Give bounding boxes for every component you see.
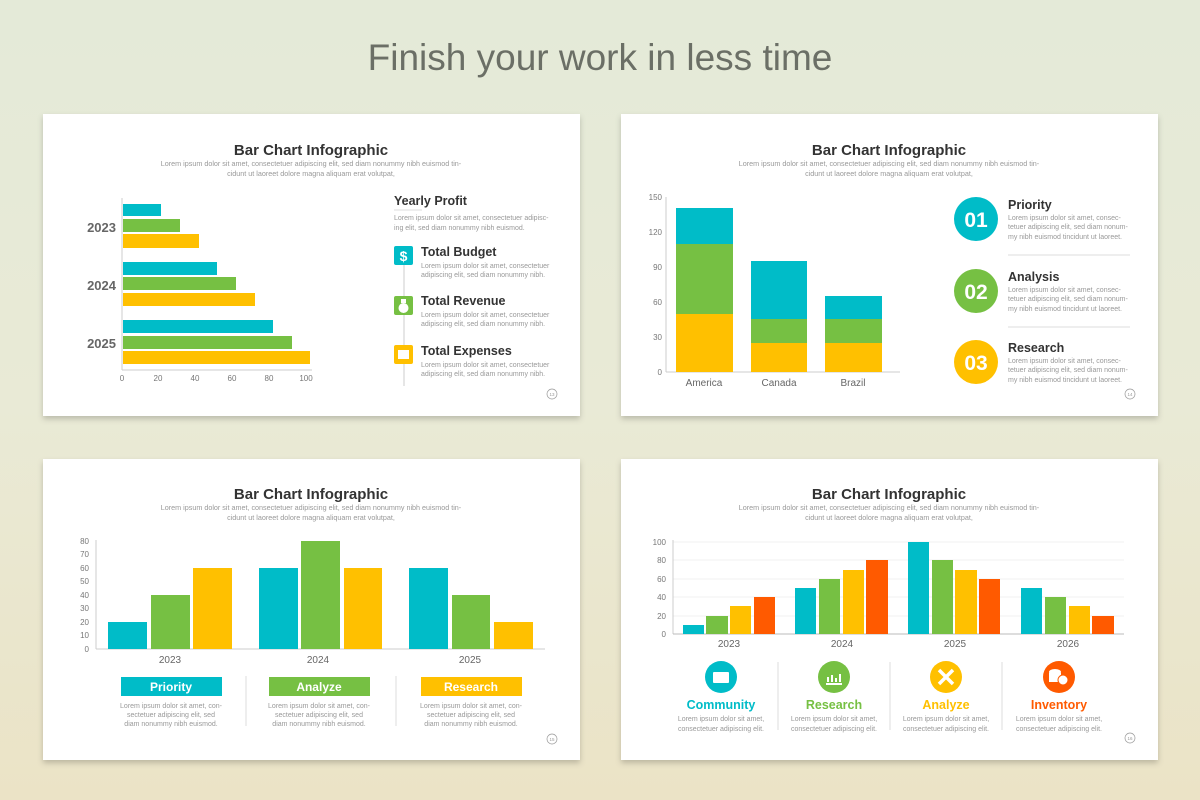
item: community: Lorem ipsum dolor sit amet, <box>678 716 764 723</box>
stacked bar chart: 150 <box>649 193 663 202</box>
item 01 priority <box>954 197 1129 241</box>
item 03 research: my nibh euismod tincidunt ut laoreet. <box>1008 377 1122 384</box>
item 02 analysis <box>954 269 1129 313</box>
grouped bar chart: 20 <box>657 612 667 621</box>
grouped bar chart: 2025 <box>459 655 482 666</box>
grouped bar chart: 80 <box>657 556 667 565</box>
stacked bar chart <box>649 193 900 389</box>
item 03 research: 03 <box>964 352 988 375</box>
item: analyze <box>903 661 989 733</box>
label: analyze: Analyze <box>296 680 342 694</box>
label: research <box>420 677 523 728</box>
panel: grouped bar chart 4 series <box>621 459 1158 760</box>
item 03 research: tetuer adipiscing elit, sed diam nonum- <box>1008 367 1129 374</box>
grouped bar chart: 80 <box>80 537 90 546</box>
main title: Finish your work in less time <box>368 37 832 78</box>
horizontal bar chart: 40 <box>191 374 200 383</box>
icon: coins <box>394 345 413 364</box>
heading: Lorem ipsum dolor sit amet, consectetuer adipiscing elit, sed diam nonummy nibh euismod tin- <box>739 159 1040 168</box>
item: analyze: consectetuer adipiscing elit. <box>903 726 989 733</box>
item: inventory: Lorem ipsum dolor sit amet, <box>1016 716 1102 723</box>
heading: Lorem ipsum dolor sit amet, consectetuer adipiscing elit, sed diam nonummy nibh euismod tin- <box>161 503 462 512</box>
label: priority: Lorem ipsum dolor sit amet, con- <box>120 703 223 710</box>
grouped bar chart: 100 <box>653 538 667 547</box>
grouped bar chart: 10 <box>80 631 90 640</box>
item: total expenses <box>421 344 550 378</box>
item 01 priority: Lorem ipsum dolor sit amet, consec- <box>1008 215 1121 222</box>
page number: 14 <box>1127 392 1133 397</box>
item: total budget: adipiscing elit, sed diam nonummy nibh. <box>421 272 545 279</box>
heading: Bar Chart Infographic <box>234 486 388 503</box>
grouped bar chart: 2024 <box>831 639 854 650</box>
heading: cidunt ut laoreet dolore magna aliquam erat volutpat, <box>227 513 395 522</box>
item: total revenue: adipiscing elit, sed diam nonummy nibh. <box>421 321 545 328</box>
item: inventory: Inventory <box>1031 698 1087 712</box>
page number: 15 <box>549 737 555 742</box>
item: analyze: Lorem ipsum dolor sit amet, <box>903 716 989 723</box>
heading: cidunt ut laoreet dolore magna aliquam erat volutpat, <box>805 513 973 522</box>
heading <box>161 142 462 178</box>
grouped bar chart: 60 <box>80 564 90 573</box>
grouped bar chart: 20 <box>80 618 90 627</box>
label: research: Lorem ipsum dolor sit amet, con- <box>420 703 523 710</box>
page number: 16 <box>1127 736 1133 741</box>
grouped bar chart: 2024 <box>307 655 330 666</box>
horizontal bar chart: 0 <box>120 374 125 383</box>
page number <box>1125 389 1135 399</box>
item: total budget: Total Budget <box>421 245 497 259</box>
item 01 priority: Priority <box>1008 198 1052 212</box>
grouped bar chart: 2023 <box>718 639 741 650</box>
item 03 research: Lorem ipsum dolor sit amet, consec- <box>1008 358 1121 365</box>
horizontal bar chart: 100 <box>299 374 313 383</box>
item: total revenue: Lorem ipsum dolor sit amet, consectetuer <box>421 312 550 319</box>
grouped bar chart: 2025 <box>944 639 967 650</box>
item 03 research: Research <box>1008 341 1064 355</box>
stacked bar chart: 60 <box>653 298 663 307</box>
item: total expenses: Lorem ipsum dolor sit amet, consectetuer <box>421 362 550 369</box>
text: yearly profit: Lorem ipsum dolor sit amet, consectetuer adipisc- <box>394 215 549 222</box>
stacked bar chart: 90 <box>653 263 663 272</box>
heading: Lorem ipsum dolor sit amet, consectetuer adipiscing elit, sed diam nonummy nibh euismod tin- <box>739 503 1040 512</box>
item 01 priority: 01 <box>964 209 988 232</box>
item: research: consectetuer adipiscing elit. <box>791 726 877 733</box>
horizontal bar chart: 2025 <box>87 336 116 351</box>
grouped bar chart: 50 <box>80 577 90 586</box>
item: total expenses: Total Expenses <box>421 344 512 358</box>
grouped bar chart: 0 <box>662 630 667 639</box>
grouped bar chart: 70 <box>80 550 90 559</box>
item 02 analysis: my nibh euismod tincidunt ut laoreet. <box>1008 306 1122 313</box>
heading: cidunt ut laoreet dolore magna aliquam erat volutpat, <box>227 169 395 178</box>
page number <box>547 389 557 399</box>
horizontal bar chart <box>87 198 313 383</box>
text: yearly profit <box>394 194 549 232</box>
grouped bar chart <box>653 538 1124 650</box>
panel: stacked bar chart <box>621 114 1158 416</box>
item: total budget <box>421 245 550 279</box>
text: yearly profit: Yearly Profit <box>394 194 468 208</box>
grouped bar chart: 2026 <box>1057 639 1080 650</box>
grouped bar chart: 60 <box>657 575 667 584</box>
stacked bar chart: 30 <box>653 333 663 342</box>
item 03 research <box>954 340 1129 384</box>
page number <box>547 734 557 744</box>
stacked bar chart: Canada <box>761 378 797 389</box>
item: inventory <box>1016 661 1102 733</box>
item 02 analysis: 02 <box>964 281 988 304</box>
item: community <box>678 661 764 733</box>
item: research: Research <box>806 698 862 712</box>
grouped bar chart: 2023 <box>159 655 182 666</box>
horizontal bar chart: 60 <box>228 374 237 383</box>
item 01 priority: my nibh euismod tincidunt ut laoreet. <box>1008 234 1122 241</box>
item 01 priority: tetuer adipiscing elit, sed diam nonum- <box>1008 224 1129 231</box>
stacked bar chart: Brazil <box>840 378 866 389</box>
horizontal bar chart: 2023 <box>87 220 116 235</box>
heading: Bar Chart Infographic <box>812 142 966 159</box>
panel: horizontal bar chart <box>43 114 580 416</box>
label: analyze: sectetuer adipiscing elit, sed <box>275 712 363 719</box>
horizontal bar chart: 80 <box>265 374 274 383</box>
item 02 analysis: tetuer adipiscing elit, sed diam nonum- <box>1008 296 1129 303</box>
label: priority: Priority <box>150 680 192 694</box>
heading <box>739 486 1040 522</box>
item: inventory: consectetuer adipiscing elit. <box>1016 726 1102 733</box>
grouped bar chart: 40 <box>80 591 90 600</box>
label: research: sectetuer adipiscing elit, sed <box>427 712 515 719</box>
item 02 analysis: Analysis <box>1008 270 1059 284</box>
item: total budget: Lorem ipsum dolor sit amet, consectetuer <box>421 263 550 270</box>
panel: grouped bar chart 3 series <box>43 459 580 760</box>
grouped bar chart: 0 <box>85 645 90 654</box>
icon: dollar <box>394 246 413 265</box>
item: research: Lorem ipsum dolor sit amet, <box>791 716 877 723</box>
heading: Lorem ipsum dolor sit amet, consectetuer adipiscing elit, sed diam nonummy nibh euismod tin- <box>161 159 462 168</box>
label: research: diam nonummy nibh euismod. <box>424 721 518 728</box>
heading: Bar Chart Infographic <box>812 486 966 503</box>
horizontal bar chart: 20 <box>154 374 163 383</box>
text: yearly profit: ing elit, sed diam nonummy nibh euismod. <box>394 225 525 232</box>
label: analyze <box>268 677 371 728</box>
label: priority: diam nonummy nibh euismod. <box>124 721 218 728</box>
grouped bar chart: 30 <box>80 604 90 613</box>
heading: cidunt ut laoreet dolore magna aliquam erat volutpat, <box>805 169 973 178</box>
stacked bar chart: 120 <box>649 228 663 237</box>
page number: 13 <box>549 392 555 397</box>
heading <box>739 142 1040 178</box>
item: community: consectetuer adipiscing elit. <box>678 726 764 733</box>
label: analyze: diam nonummy nibh euismod. <box>272 721 366 728</box>
item 02 analysis: Lorem ipsum dolor sit amet, consec- <box>1008 287 1121 294</box>
label: priority: sectetuer adipiscing elit, sed <box>127 712 215 719</box>
icon: dollar: $ <box>400 248 408 264</box>
stacked bar chart: America <box>686 378 723 389</box>
label: research: Research <box>444 680 498 694</box>
horizontal bar chart: 2024 <box>87 278 117 293</box>
page number <box>1125 733 1135 743</box>
grouped bar chart: 40 <box>657 593 667 602</box>
item: research <box>791 661 877 733</box>
grouped bar chart <box>80 537 545 666</box>
item: community: Community <box>687 698 755 712</box>
item: total revenue <box>421 294 550 328</box>
label: analyze: Lorem ipsum dolor sit amet, con- <box>268 703 371 710</box>
heading: Bar Chart Infographic <box>234 142 388 159</box>
stacked bar chart: 0 <box>658 368 663 377</box>
icon: money bag <box>394 296 413 315</box>
item: total revenue: Total Revenue <box>421 294 506 308</box>
item: analyze: Analyze <box>922 698 970 712</box>
heading <box>161 486 462 522</box>
item: total expenses: adipiscing elit, sed diam nonummy nibh. <box>421 371 545 378</box>
label: priority <box>120 677 223 728</box>
